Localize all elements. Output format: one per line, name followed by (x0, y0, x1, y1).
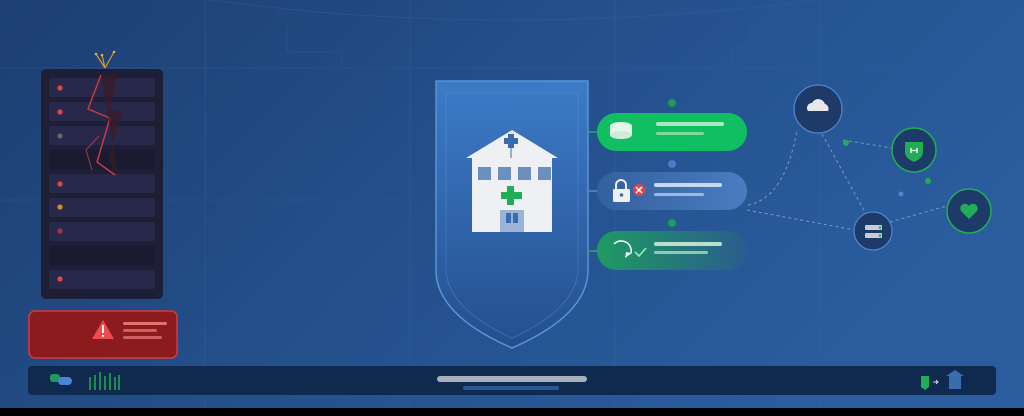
icon: server node (854, 212, 892, 250)
shield with hospital (436, 81, 588, 348)
crack (86, 51, 122, 175)
hospital building (466, 130, 558, 232)
icon: shield node (892, 128, 936, 172)
pill: recovery (597, 231, 747, 270)
bottom status bar (28, 366, 996, 395)
alert box (29, 311, 177, 358)
dashed connectors (747, 130, 950, 230)
server rack (41, 51, 163, 299)
pill: database (597, 113, 747, 151)
icon: cloud node (794, 85, 842, 133)
icon: heart node (947, 189, 991, 233)
pill: lock (597, 172, 747, 210)
